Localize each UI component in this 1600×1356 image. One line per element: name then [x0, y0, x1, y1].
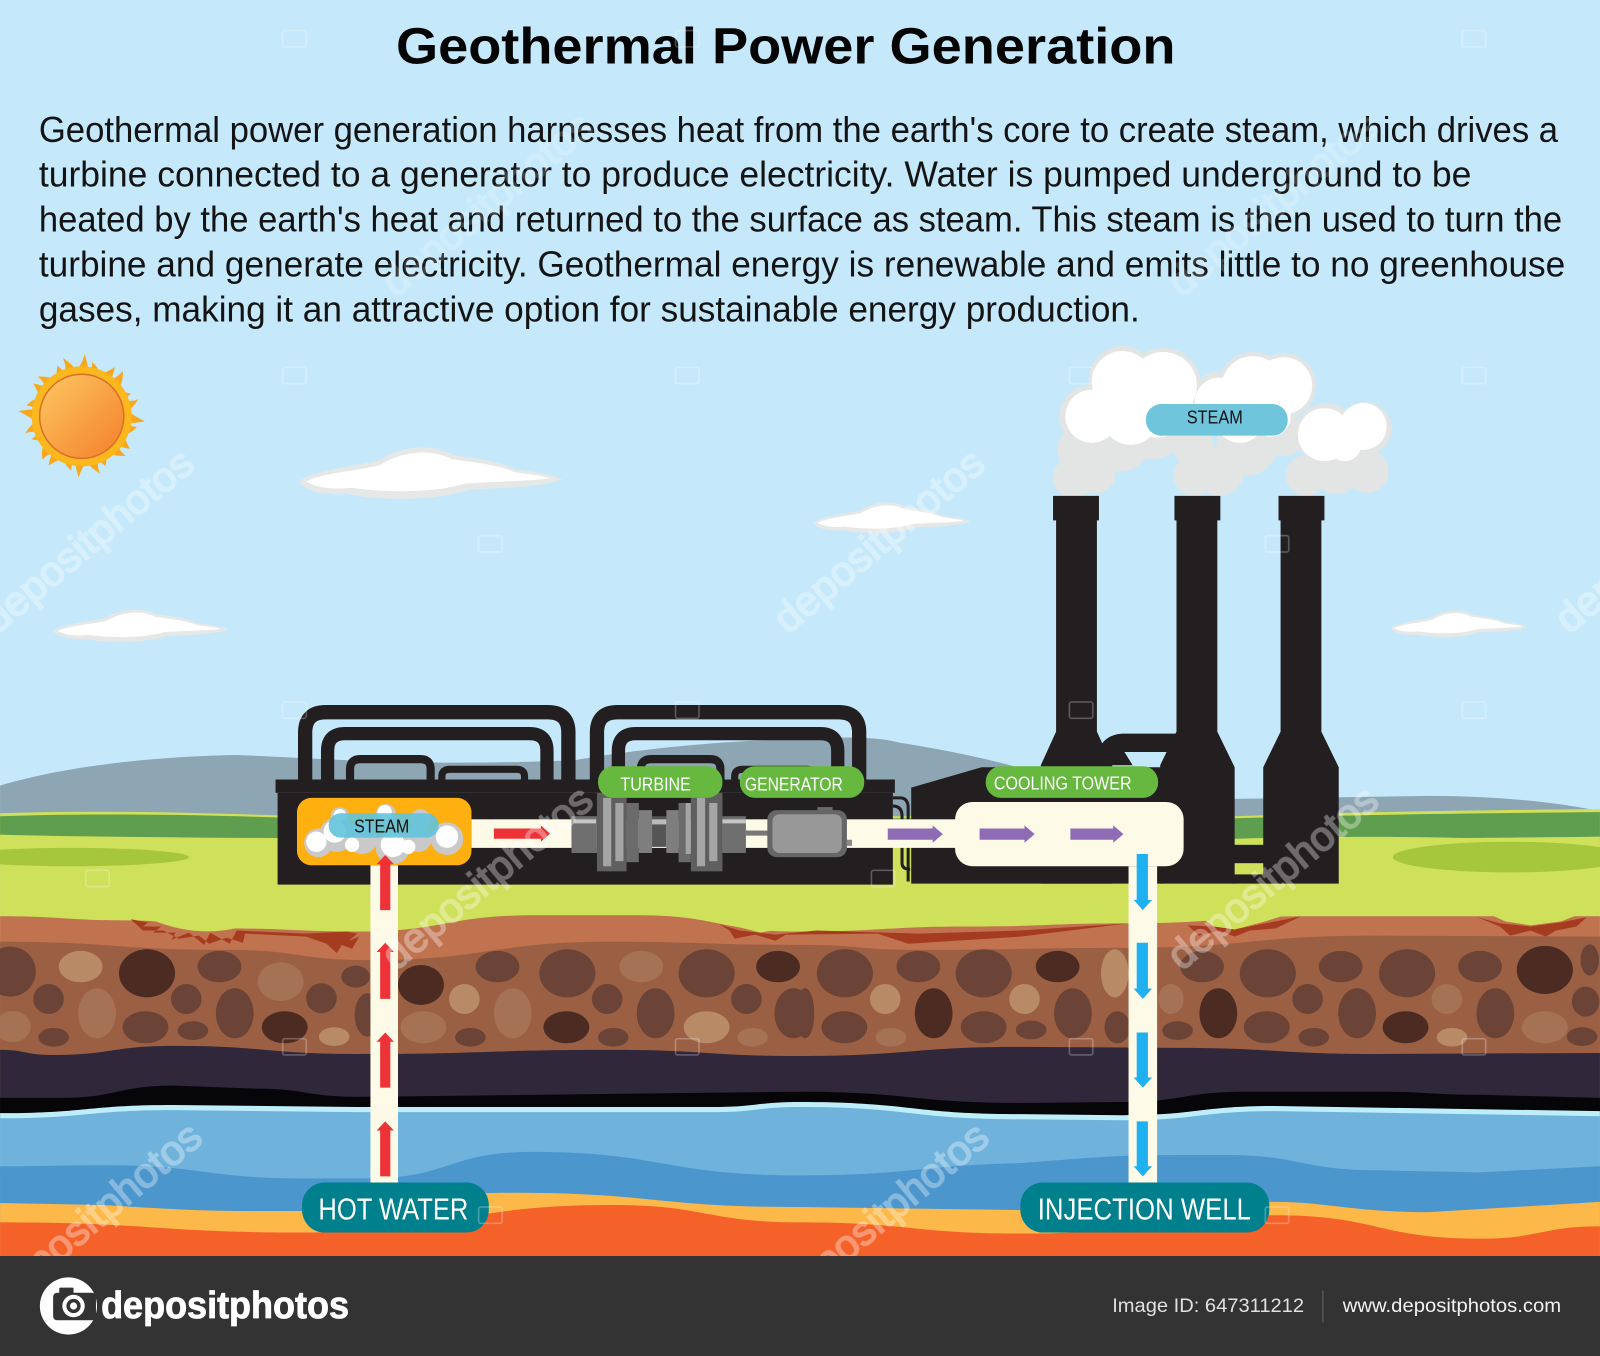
- watermarks: depositphotos: [768, 1112, 997, 1315]
- layer: rocky soil: [0, 936, 1600, 1256]
- footer logo text: depositphotos: [101, 1284, 349, 1326]
- label: hot water: HOT WATER: [318, 1192, 468, 1226]
- layer: light water: [0, 1107, 1600, 1256]
- cooling building: [911, 767, 1163, 884]
- mountains: [0, 737, 1600, 847]
- cloud: middle: [813, 502, 970, 533]
- grass tufts: [153, 914, 1580, 933]
- rocks: left half: [0, 947, 812, 1047]
- icon: sun: [18, 354, 145, 478]
- text block: description: heated by the earth's heat and returned to the surface as steam. This steam is then used to turn the: [39, 200, 1562, 240]
- watermarks: depositphotos: [1158, 776, 1387, 978]
- ground: grass band: [0, 809, 1600, 944]
- plant: building: [276, 780, 895, 885]
- connector pipe: [1098, 734, 1179, 765]
- steam cloud above chimneys: [1053, 346, 1392, 498]
- turbine: [571, 793, 746, 871]
- cloud: top centre: [299, 447, 562, 499]
- layer: topsoil: [0, 915, 1600, 1256]
- cloud: left: [53, 610, 229, 642]
- label: steam in chamber: STEAM: [354, 816, 409, 837]
- footer image id: Image ID: 647311212: [1112, 1295, 1304, 1317]
- label: cooling tower: COOLING TOWER: [994, 773, 1132, 794]
- title: Geothermal Power Generation: [396, 17, 1175, 74]
- watermarks: depositphotos: [764, 439, 993, 642]
- label: turbine: [598, 766, 722, 798]
- label: steam at chimneys: STEAM: [1187, 406, 1243, 427]
- blue arrows: injection pipe: [1134, 854, 1152, 1176]
- lower connector: [1233, 845, 1265, 863]
- layer: hot band: [0, 1193, 1600, 1256]
- base strip between chimneys: [1233, 874, 1265, 884]
- label: generator: GENERATOR: [745, 774, 843, 795]
- label: injection well: INJECTION WELL: [1038, 1192, 1251, 1226]
- text block: description: turbine and generate electricity. Geothermal energy is renewable and emits little to no greenhouse: [39, 245, 1565, 285]
- generator: [746, 807, 852, 857]
- arrow: red into turbine: [494, 825, 550, 842]
- chimney 1: [1041, 496, 1112, 884]
- layer: black rock: [0, 1086, 1600, 1256]
- watermark camera marks: [86, 31, 1486, 1223]
- layer: water surface: [0, 1102, 1600, 1256]
- watermarks: depositphotos: [372, 102, 601, 305]
- label: turbine: TURBINE: [620, 774, 691, 795]
- label: injection well: [1020, 1183, 1269, 1233]
- pipe: injection well: [1129, 866, 1157, 1183]
- red arrows: hot water pipe: [377, 855, 394, 1176]
- underground layers: [0, 914, 1600, 1256]
- chimneys: [1041, 496, 1339, 884]
- panel: steam chamber: [297, 798, 471, 865]
- footer website: www.depositphotos.com: [1342, 1295, 1561, 1317]
- watermarks: depositphotos: [1158, 102, 1387, 305]
- footer bar: [0, 1256, 1600, 1356]
- cream steam pipe: [471, 819, 961, 848]
- connecting pipes between buildings: [893, 798, 910, 882]
- steam puffs: [304, 804, 463, 864]
- panel: cooling tower box: [955, 802, 1184, 866]
- chimney 3: [1263, 496, 1339, 884]
- footer logo icon: [40, 1277, 97, 1335]
- layer: dark rock: [0, 1046, 1600, 1256]
- label: steam at chimneys: [1146, 404, 1288, 436]
- plant: pipework on roof: [305, 712, 859, 786]
- text block: description: turbine connected to a generator to produce electricity. Water is pumped underground to be: [39, 155, 1471, 195]
- layer: deep water: [0, 1152, 1600, 1256]
- chimney 2: [1160, 496, 1235, 884]
- text block: description: [39, 110, 1565, 329]
- cloud: right: [1391, 610, 1528, 637]
- pipe: hot water: [370, 865, 398, 1183]
- purple arrows: [888, 825, 1123, 843]
- text block: description: Geothermal power generation harnesses heat from the earth's core to create steam, which drives a: [39, 110, 1558, 150]
- label: cooling tower: [986, 766, 1158, 798]
- layer: magma: [0, 1205, 1600, 1256]
- label: generator: [740, 766, 864, 798]
- label: steam in chamber: [329, 813, 439, 838]
- rocks: right half: [796, 944, 1599, 1047]
- watermarks: depositphotos: [372, 776, 601, 978]
- roots: grass patches: [131, 916, 1587, 953]
- label: hot water: [302, 1183, 489, 1233]
- text block: description: gases, making it an attractive option for sustainable energy production.: [39, 289, 1140, 329]
